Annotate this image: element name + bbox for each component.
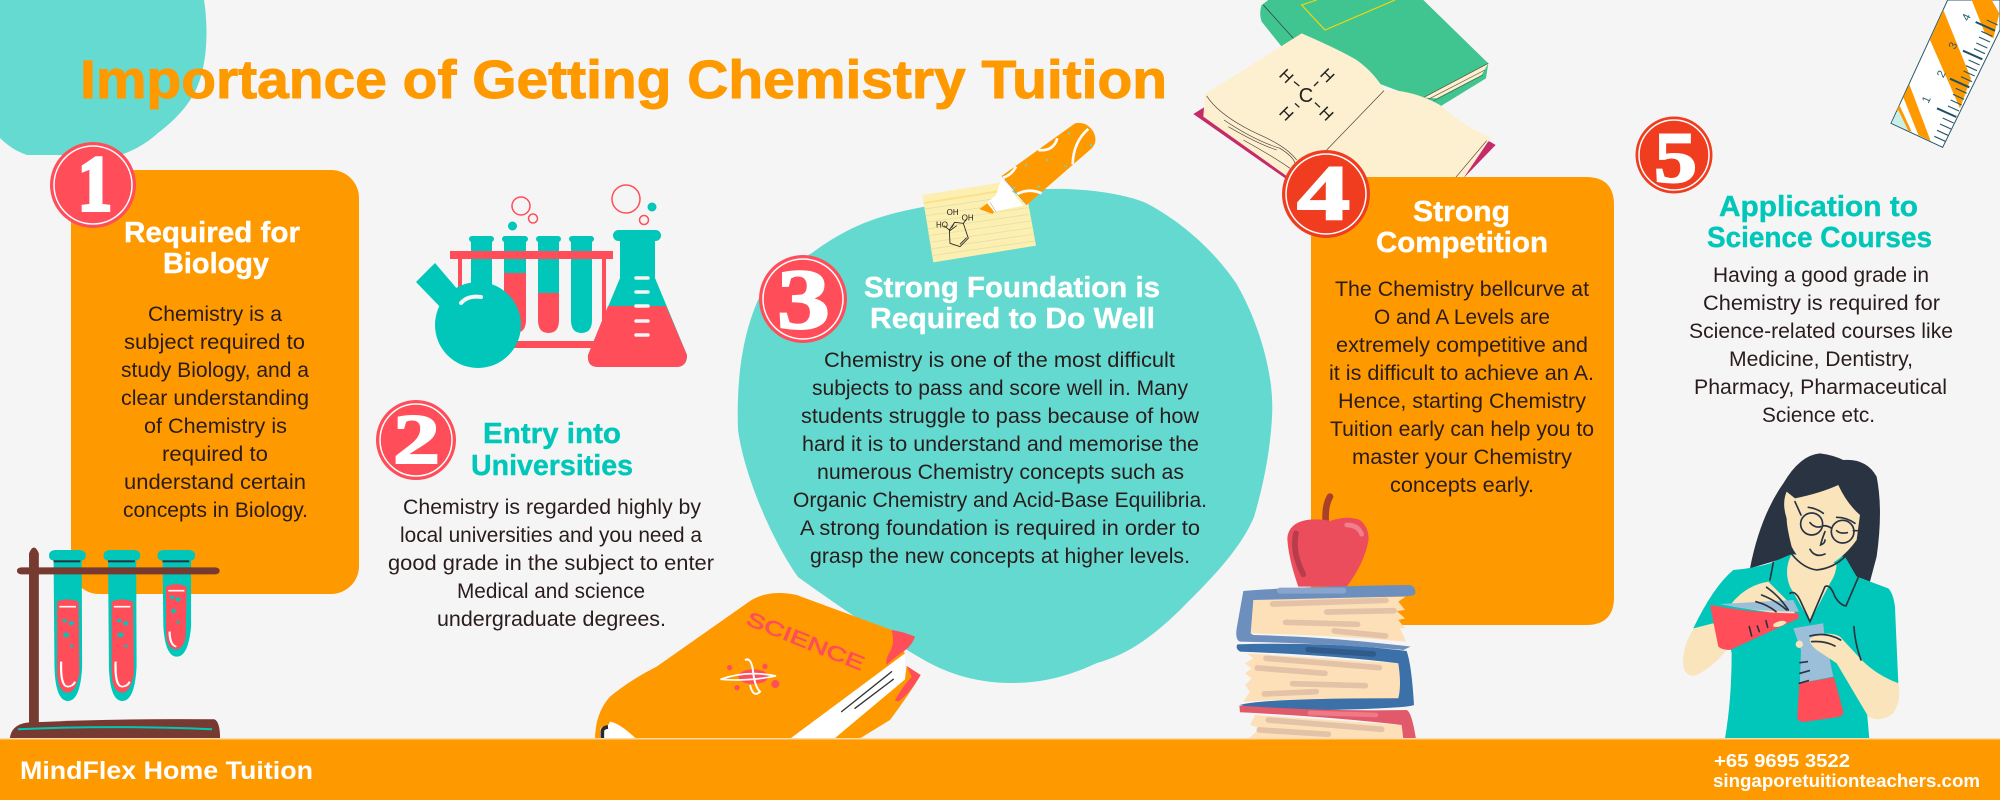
heading: Application to — [1719, 191, 1918, 223]
body text: students struggle to pass because of how — [801, 404, 1199, 428]
body text: O and A Levels are — [1374, 305, 1550, 329]
body text: Science etc. — [1762, 403, 1875, 427]
body text: A strong foundation is required in order to — [800, 516, 1200, 540]
body text: of Chemistry is — [144, 414, 287, 438]
methane formula — [1275, 64, 1338, 125]
heading: Strong — [1413, 196, 1510, 228]
decorative teal blob: top left — [0, 0, 206, 155]
badge: number 1 — [50, 140, 136, 228]
body text: hard it is to understand and memorise the — [802, 432, 1199, 456]
book stack — [1236, 585, 1416, 739]
heading — [1707, 191, 1932, 254]
body text: undergraduate degrees. — [437, 607, 666, 631]
methane formula: H — [1316, 64, 1338, 86]
heading: Science Courses — [1707, 222, 1932, 254]
body text: local universities and you need a — [400, 523, 702, 547]
footer contact — [1713, 751, 1980, 791]
card background — [71, 170, 359, 594]
badge: number 5: 5 — [1654, 118, 1697, 198]
badge: number 2: 2 — [393, 401, 440, 479]
body text: The Chemistry bellcurve at — [1335, 277, 1589, 301]
methane formula: H — [1275, 103, 1297, 125]
body text: numerous Chemistry concepts such as — [817, 460, 1184, 484]
body text: Chemistry is regarded highly by — [403, 495, 701, 519]
methane formula: C — [1299, 85, 1313, 107]
sticky note: OH — [962, 213, 974, 222]
body text: concepts in Biology. — [123, 498, 308, 522]
heading: Entry into — [483, 418, 621, 450]
illustration: orange science book — [595, 593, 921, 740]
badge: number 3: 3 — [777, 251, 830, 347]
body text: understand certain — [124, 470, 306, 494]
body text: subject required to — [124, 330, 305, 354]
heading: Strong Foundation is — [864, 272, 1160, 304]
icon: atom — [721, 659, 779, 694]
heading — [864, 272, 1160, 335]
body text: subjects to pass and score well in. Many — [812, 376, 1188, 400]
illustration: ruler — [1891, 0, 2000, 147]
body text: it is difficult to achieve an A. — [1329, 361, 1594, 385]
body text: clear understanding — [121, 386, 309, 410]
body text: Hence, starting Chemistry — [1338, 389, 1586, 413]
body text: Pharmacy, Pharmaceutical — [1694, 375, 1947, 399]
illustration: apple on stack of books — [1236, 497, 1416, 739]
illustration: flasks and test tube rack — [416, 185, 687, 368]
methane formula: H — [1275, 65, 1297, 87]
body text: Chemistry is required for — [1703, 291, 1940, 315]
sticky note — [922, 183, 1036, 262]
heading: Competition — [1376, 227, 1548, 259]
body text: Chemistry is one of the most difficult — [824, 348, 1175, 372]
apple — [1287, 497, 1369, 587]
body text: master your Chemistry — [1352, 445, 1572, 469]
body text: Medical and science — [457, 579, 645, 603]
highlighter — [979, 123, 1095, 214]
panel: section 5 application to science courses — [1636, 116, 1953, 427]
book title: SCIENCE — [743, 608, 867, 675]
illustration: test tube stand — [10, 547, 220, 739]
heading — [124, 217, 300, 280]
badge: number 4: 4 — [1297, 149, 1350, 236]
body text — [1689, 263, 1953, 427]
body text: Chemistry is a — [148, 302, 282, 326]
illustration: ruler: 4 — [1960, 12, 1974, 23]
heading: Biology — [163, 248, 269, 280]
footer bar — [0, 738, 2000, 800]
body text: Organic Chemistry and Acid-Base Equilibria. — [793, 488, 1207, 512]
body text — [1329, 277, 1594, 497]
body text: required to — [162, 442, 268, 466]
illustration: ruler: 2 — [1935, 69, 1949, 80]
footer brand: MindFlex Home Tuition — [20, 757, 313, 785]
title: Importance of Getting Chemistry Tuition — [80, 50, 1167, 110]
card background — [1311, 177, 1614, 625]
illustration: green book and open book — [1193, 0, 1496, 182]
sticky note: HO — [936, 221, 948, 230]
heading — [1376, 196, 1548, 259]
body text — [121, 302, 309, 522]
body text: grasp the new concepts at higher levels. — [810, 544, 1190, 568]
panel: section 4 strong competition — [1282, 149, 1614, 625]
footer contact: +65 9695 3522 — [1714, 751, 1850, 771]
body text: Tuition early can help you to — [1330, 417, 1594, 441]
heading: Required to Do Well — [870, 303, 1155, 335]
illustration: sticky note with highlighter — [922, 123, 1095, 262]
badge: number 4 — [1282, 149, 1370, 238]
illustration: ruler: 1 — [1920, 94, 1934, 105]
body text: Science-related courses like — [1689, 319, 1953, 343]
body text: Medicine, Dentistry, — [1729, 347, 1913, 371]
badge: number 2 — [376, 400, 456, 480]
badge: number 5 — [1636, 116, 1712, 198]
body text: good grade in the subject to enter — [388, 551, 714, 575]
heading — [471, 418, 633, 482]
panel: section 2 entry into universities — [376, 400, 714, 631]
panel: section 3 strong foundation — [759, 251, 1207, 568]
body text: concepts early. — [1390, 473, 1534, 497]
footer contact: singaporetuitionteachers.com — [1713, 771, 1980, 791]
body text — [793, 348, 1207, 568]
body text: Having a good grade in — [1713, 263, 1929, 287]
sticky note: OH — [947, 208, 959, 217]
badge: number 3 — [759, 251, 847, 347]
body text: study Biology, and a — [121, 358, 309, 382]
panel: section 1 required for biology — [50, 140, 359, 594]
badge: number 1: 1 — [78, 140, 112, 227]
body text: extremely competitive and — [1336, 333, 1588, 357]
body text — [388, 495, 714, 631]
illustration: ruler: 3 — [1947, 40, 1960, 51]
illustration: student pouring flasks — [1683, 453, 1899, 739]
heading: Universities — [471, 450, 633, 482]
decorative teal blob: section 3 background — [738, 189, 1272, 683]
methane formula: H — [1315, 103, 1337, 125]
heading: Required for — [124, 217, 300, 249]
